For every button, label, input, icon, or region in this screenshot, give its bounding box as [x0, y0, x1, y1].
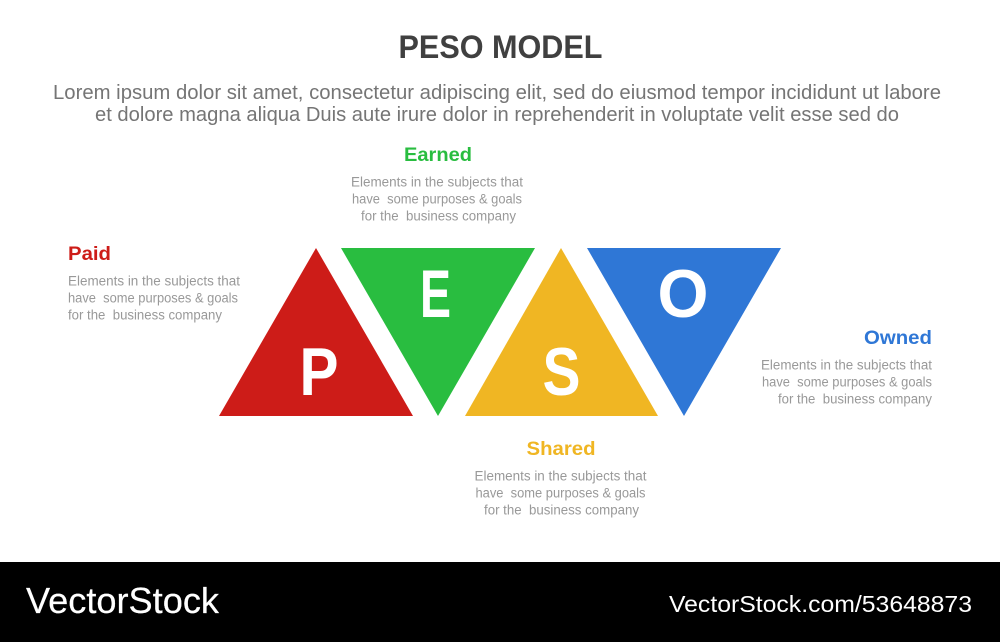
text block: owned: Owned: [864, 327, 932, 349]
text block: shared: Elements in the subjects that: [474, 468, 647, 484]
subtitle text: Lorem ipsum dolor sit amet, consectetur adipiscing elit, sed do eiusmod tempor incididunt ut labore: [53, 82, 941, 104]
text block: owned: [761, 327, 932, 406]
panel: earned triangle: E: [420, 256, 451, 332]
text block: earned: have some purposes & goals: [352, 192, 522, 206]
text block: earned: for the business company: [361, 208, 516, 224]
text block: paid: Paid: [68, 243, 111, 265]
text block: shared: [474, 438, 647, 518]
text block: paid: for the business company: [68, 308, 222, 322]
panel: owned triangle: [587, 248, 781, 416]
text block: paid: Elements in the subjects that: [68, 274, 240, 288]
panel: owned triangle: O: [658, 256, 708, 332]
panel: earned triangle: [341, 248, 535, 416]
panel: paid triangle: [219, 248, 413, 416]
text block: shared: have some purposes & goals: [476, 486, 646, 500]
subtitle text: [53, 82, 941, 126]
text block: owned: for the business company: [778, 392, 932, 406]
footer logo: VectorStock: [26, 580, 220, 621]
text block: owned: Elements in the subjects that: [761, 358, 932, 372]
text block: paid: have some purposes & goals: [68, 290, 238, 306]
text block: earned: Earned: [404, 144, 472, 166]
footer url: VectorStock.com/53648873: [669, 591, 972, 617]
subtitle text: et dolore magna aliqua Duis aute irure dolor in reprehenderit in voluptate velit esse sed do: [95, 104, 899, 126]
text block: owned: have some purposes & goals: [762, 374, 932, 390]
text block: paid: [68, 243, 240, 322]
panel: shared triangle: [465, 248, 658, 416]
text block: earned: Elements in the subjects that: [351, 174, 523, 190]
panel: paid triangle: P: [300, 334, 338, 410]
text block: shared: Shared: [526, 438, 596, 460]
title: PESO MODEL: [398, 29, 602, 65]
text block: earned: [351, 144, 523, 224]
panel: shared triangle: S: [542, 334, 580, 410]
footer bar: [0, 562, 1000, 642]
text block: shared: for the business company: [484, 502, 639, 518]
